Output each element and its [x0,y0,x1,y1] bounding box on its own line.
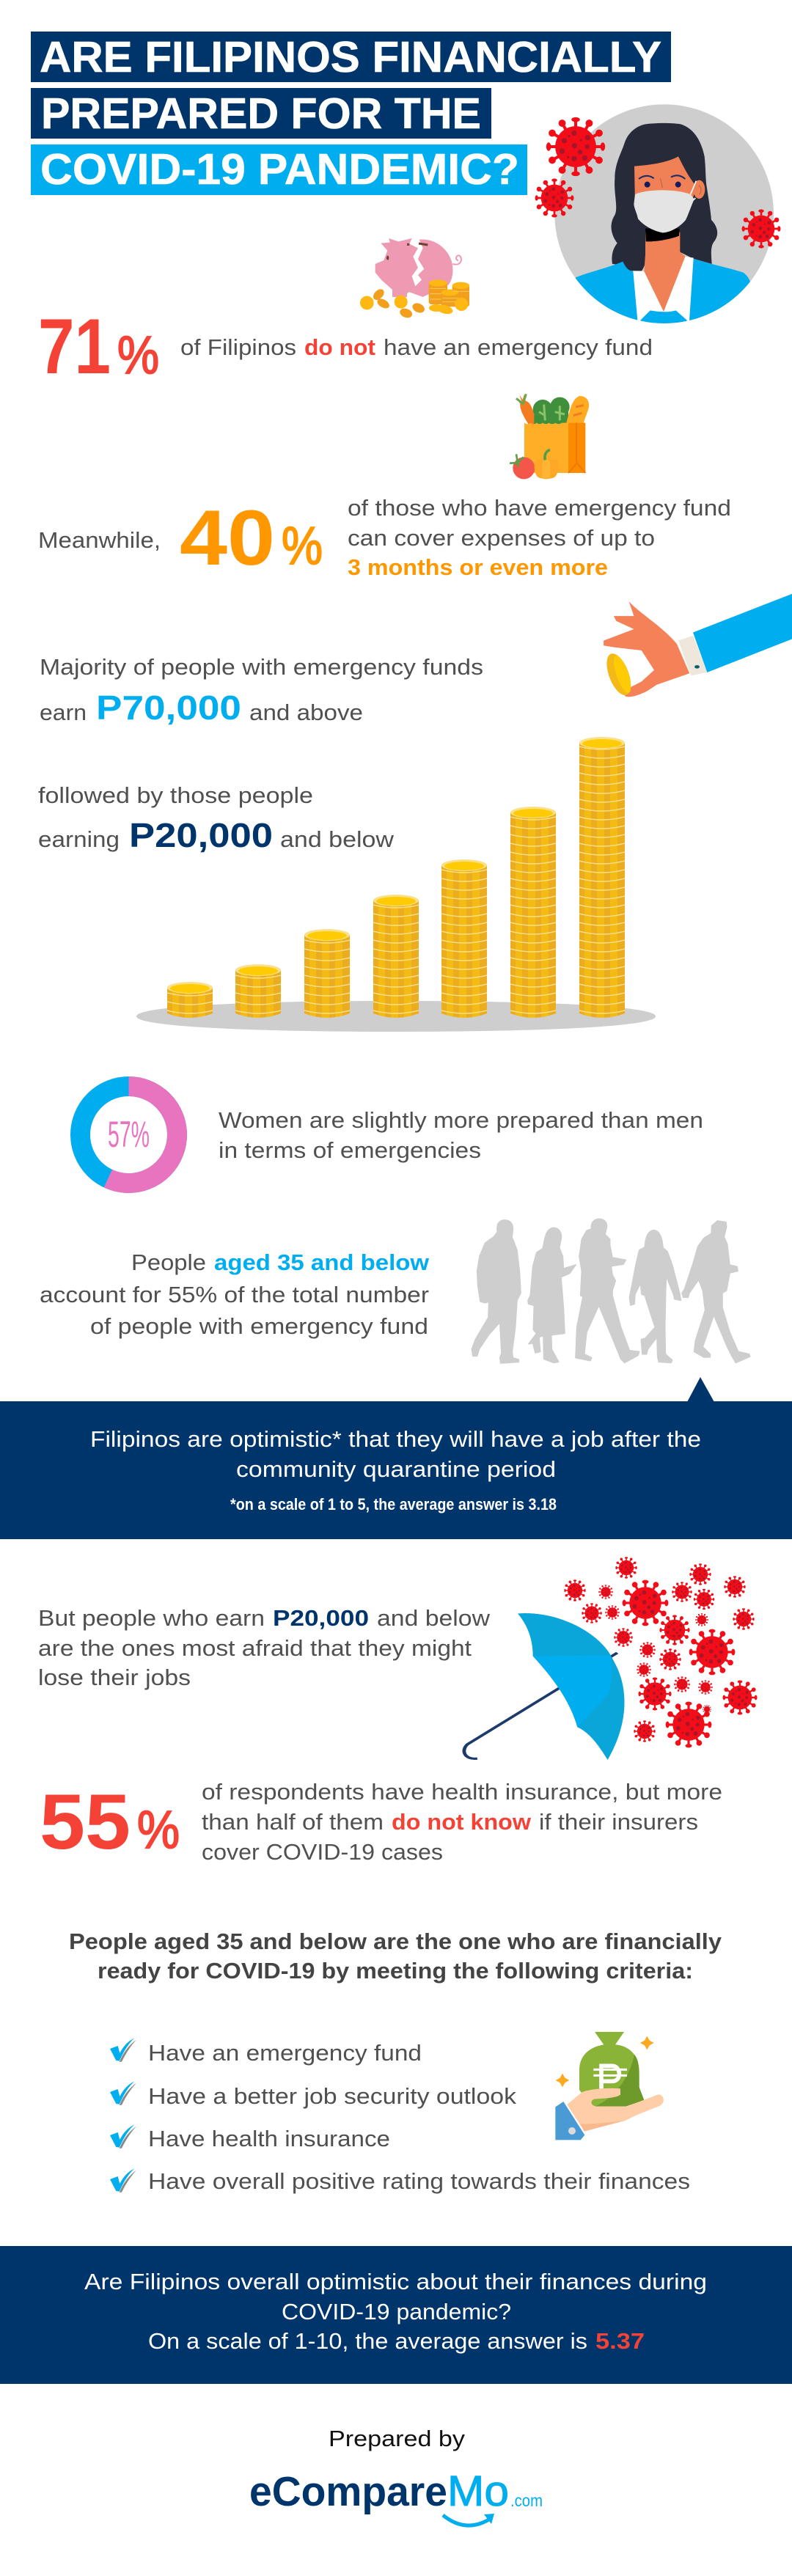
panel: overall optimism: COVID-19 pandemic? [282,2299,511,2324]
heading: financially ready criteria: ready for COVID-19 by meeting the following criteria: [98,1958,693,1984]
stat: 55% health insurance [40,1777,722,1865]
stat: 55% health insurance: do not know [392,1809,532,1835]
text: P20,000 and below: followed by those people [38,782,313,808]
stat: 40% can cover expenses: can cover expenses of up to [348,525,655,551]
panel: optimistic about job [0,1401,792,1539]
text: P20,000 and below [38,782,395,854]
illustration: umbrella blocking viruses [464,1557,758,1760]
panel: optimistic about job: community quarantine period [236,1456,556,1482]
text: P70,000 and above: P70,000 [96,689,241,727]
text: P20,000 and below: earning [38,826,120,852]
stat: 71% no emergency fund: of Filipinos [180,334,296,360]
stat: 55% health insurance: cover COVID-19 cases [202,1839,443,1865]
item: job security: Have a better job security outlook [148,2083,517,2109]
text: women more prepared [219,1107,703,1163]
stat: 71% no emergency fund: % [117,326,159,385]
text: P70,000 and above: earn [40,700,87,725]
text: afraid of losing jobs: But people who earn [38,1605,265,1631]
donut chart: 57% women [81,1087,177,1184]
text: P70,000 and above [40,654,483,727]
stat: 40% can cover expenses: 3 months or even more [348,554,608,580]
heading: financially ready criteria [69,1929,722,1984]
text: people aged 35 and below: aged 35 and below [214,1250,430,1275]
stat: 40% can cover expenses [38,493,731,581]
title line 3: COVID-19 PANDEMIC? [40,145,519,194]
text: afraid of losing jobs: lose their jobs [38,1665,191,1690]
logo: eCompareMo.com [249,2467,543,2525]
illustration: walking people silhouettes [472,1219,750,1363]
illustration: woman wearing mask surrounded by viruses [535,104,780,330]
stat: 40% can cover expenses: Meanwhile, [38,527,161,553]
item: emergency fund: Have an emergency fund [148,2040,422,2066]
stat: 55% health insurance: of respondents have health insurance, but more [202,1779,722,1805]
text: afraid of losing jobs: P20,000 [273,1605,369,1631]
logo: eCompareMo.com: .com [510,2491,543,2510]
panel: overall optimism: Are Filipinos overall optimistic about their finances during [84,2269,707,2294]
panel: overall optimism: On a scale of 1-10, the average answer is [148,2328,587,2354]
stat: 55% health insurance: if their insurers [539,1809,698,1835]
text: afraid of losing jobs: and below [377,1605,491,1631]
panel: optimistic about job: *on a scale of 1 to 5, the average answer is 3.18 [230,1495,557,1513]
stat: 71% no emergency fund [38,302,653,390]
icon: hand dropping a coin [602,594,792,697]
title [31,32,671,195]
text: P20,000 and below: P20,000 [129,816,273,854]
icon: grocery bag [510,394,589,479]
icon: hand holding peso money bag [555,2032,664,2140]
text: people aged 35 and below: People [131,1250,206,1275]
text: P70,000 and above: Majority of people with emergency funds [40,654,483,680]
panel: overall optimism: 5.37 [595,2328,645,2354]
stat: 40% can cover expenses: 40 [180,493,275,581]
text: women more prepared: Women are slightly more prepared than men [219,1107,703,1133]
text: P70,000 and above: and above [249,700,363,725]
heading: financially ready criteria: People aged 35 and below are the one who are financially [69,1929,722,1954]
checklist: criteria [110,2038,690,2194]
panel: optimistic about job: Filipinos are optimistic* that they will have a job after the [90,1426,701,1452]
stat: 55% health insurance: % [137,1801,180,1860]
stat: 71% no emergency fund: have an emergency fund [384,334,653,360]
logo: eCompareMo.com: Mo [447,2467,509,2515]
title line 1: ARE FILIPINOS FINANCIALLY [40,33,661,81]
donut chart: 57% women: 57% [108,1114,150,1155]
stat: 71% no emergency fund: do not [304,334,375,360]
stat: 40% can cover expenses: of those who have emergency fund [348,495,731,521]
text: people aged 35 and below: account for 55% of the total number [40,1282,429,1307]
text: women more prepared: in terms of emergencies [219,1137,481,1163]
text: P20,000 and below: and below [280,826,395,852]
panel: overall optimism [0,2246,792,2384]
title line 2: PREPARED FOR THE [41,89,481,138]
item: positive rating: Have overall positive rating towards their finances [148,2168,690,2194]
stat: 71% no emergency fund: 71 [38,302,111,390]
text: afraid of losing jobs [38,1605,491,1690]
text: afraid of losing jobs: are the ones most afraid that they might [38,1635,472,1661]
item: health insurance: Have health insurance [148,2126,390,2151]
stat: 55% health insurance: than half of them [202,1809,384,1835]
stat: 55% health insurance: 55 [40,1777,131,1865]
text: people aged 35 and below: of people with emergency fund [90,1313,428,1339]
arrow: pointer above navy panel [687,1377,714,1402]
text: prepared by: Prepared by [329,2426,466,2451]
chart: stacks of coins rising [136,737,656,1032]
icon: broken piggy bank with coins [360,238,469,320]
stat: 40% can cover expenses: % [282,517,323,576]
text: people aged 35 and below [40,1250,430,1339]
logo: eCompareMo.com: eCompare [249,2468,447,2515]
